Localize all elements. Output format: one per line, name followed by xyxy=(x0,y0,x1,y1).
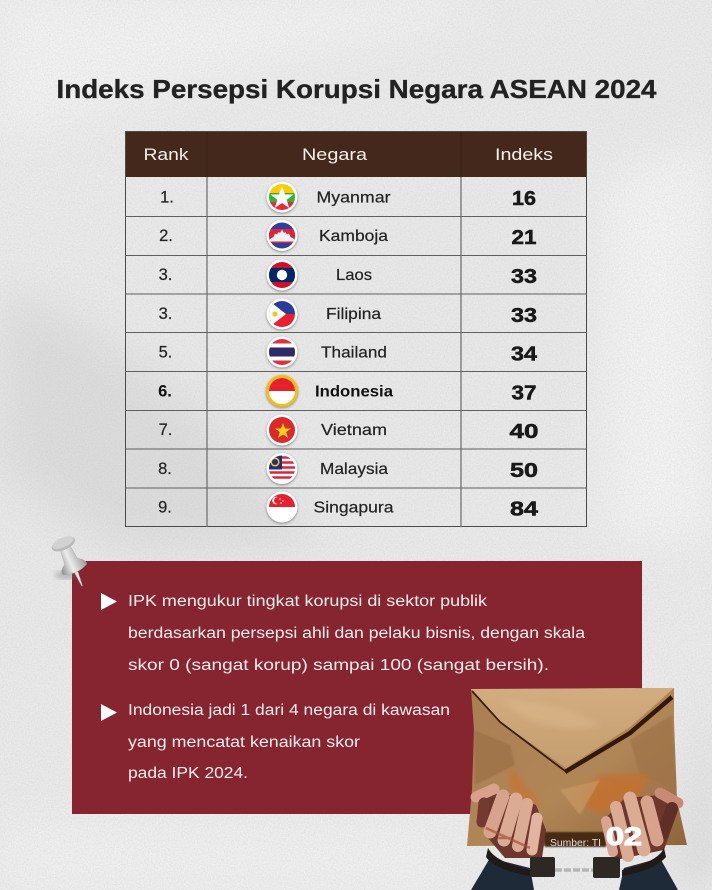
creases xyxy=(474,730,515,785)
row: Laos: Laos xyxy=(336,267,372,284)
row: Myanmar: 16 xyxy=(512,187,536,210)
text block: Indonesia score increase: Indonesia jadi 1 dari 4 negara di kawasan xyxy=(128,702,450,719)
table header: Negara xyxy=(302,145,368,164)
text block: Indonesia score increase: yang mencatat kenaikan skor xyxy=(128,734,360,751)
row: Singapura: 84 xyxy=(510,498,539,520)
row: Malaysia: 50 xyxy=(510,459,538,482)
source label: Sumber: TI xyxy=(550,837,601,849)
title: Indeks Persepsi Korupsi Negara ASEAN 2024 xyxy=(56,74,657,104)
row: Myanmar xyxy=(160,182,536,212)
row: Thailand xyxy=(159,336,538,368)
flap xyxy=(471,688,674,768)
text block: IPK definition xyxy=(128,593,585,674)
row: Vietnam: Vietnam xyxy=(321,422,387,439)
table: corruption perception index ranking xyxy=(125,131,587,527)
row: Vietnam: 7. xyxy=(159,421,172,439)
text block: Indonesia score increase xyxy=(128,702,450,782)
table header: Rank xyxy=(144,145,189,164)
icon: push pin xyxy=(49,533,94,591)
handcuffs xyxy=(486,848,666,878)
row: Laos xyxy=(159,260,537,290)
row: Indonesia (highlighted): 6. xyxy=(158,382,172,400)
row: Vietnam xyxy=(159,414,538,446)
table header: Indeks xyxy=(495,145,553,164)
panel: explanation xyxy=(72,561,642,814)
row: Indonesia (highlighted): 37 xyxy=(512,382,536,404)
row: Singapura xyxy=(158,492,539,522)
row: Thailand: 34 xyxy=(511,342,538,366)
row: Malaysia: Malaysia xyxy=(320,461,388,478)
icon: bullet arrow 2 xyxy=(101,704,117,721)
row: Kamboja: Kamboja xyxy=(319,228,388,245)
row: Laos: 33 xyxy=(511,265,537,288)
arms xyxy=(471,858,534,890)
text block: IPK definition: IPK mengukur tingkat korupsi di sektor publik xyxy=(128,593,487,610)
row: Myanmar: 1. xyxy=(160,188,174,206)
row: Laos: 3. xyxy=(159,266,172,284)
left hand xyxy=(476,789,546,858)
row: Filipina xyxy=(159,298,537,330)
row: Malaysia xyxy=(158,453,538,484)
row: Thailand: 5. xyxy=(159,344,172,362)
row: Filipina: 33 xyxy=(511,304,537,327)
row: Filipina: Filipina xyxy=(326,306,381,323)
text block: Indonesia score increase: pada IPK 2024. xyxy=(128,765,248,782)
envelope xyxy=(467,688,687,847)
row: Vietnam: 40 xyxy=(510,420,538,443)
row: Kamboja: 2. xyxy=(159,227,173,245)
illustration: envelope held by handcuffed hands xyxy=(467,688,687,890)
row: Indonesia (highlighted) xyxy=(158,376,536,406)
icon: bullet arrow 1 xyxy=(101,593,117,610)
text block: IPK definition: skor 0 (sangat korup) sampai 100 (sangat bersih). xyxy=(128,657,549,674)
row: Kamboja xyxy=(159,220,536,251)
row: Singapura: 9. xyxy=(158,498,172,516)
row: Malaysia: 8. xyxy=(158,460,172,478)
table header xyxy=(125,131,587,177)
text block: IPK definition: berdasarkan persepsi ahli dan pelaku bisnis, dengan skala xyxy=(128,625,585,642)
row: Singapura: Singapura xyxy=(314,500,394,516)
row: Kamboja: 21 xyxy=(512,226,536,249)
row: Filipina: 3. xyxy=(159,305,172,323)
right hand xyxy=(602,793,680,860)
row: Thailand: Thailand xyxy=(321,344,387,362)
row: Myanmar: Myanmar xyxy=(316,190,391,206)
row: Indonesia (highlighted): Indonesia xyxy=(315,384,393,400)
page number: 02 xyxy=(606,823,642,851)
